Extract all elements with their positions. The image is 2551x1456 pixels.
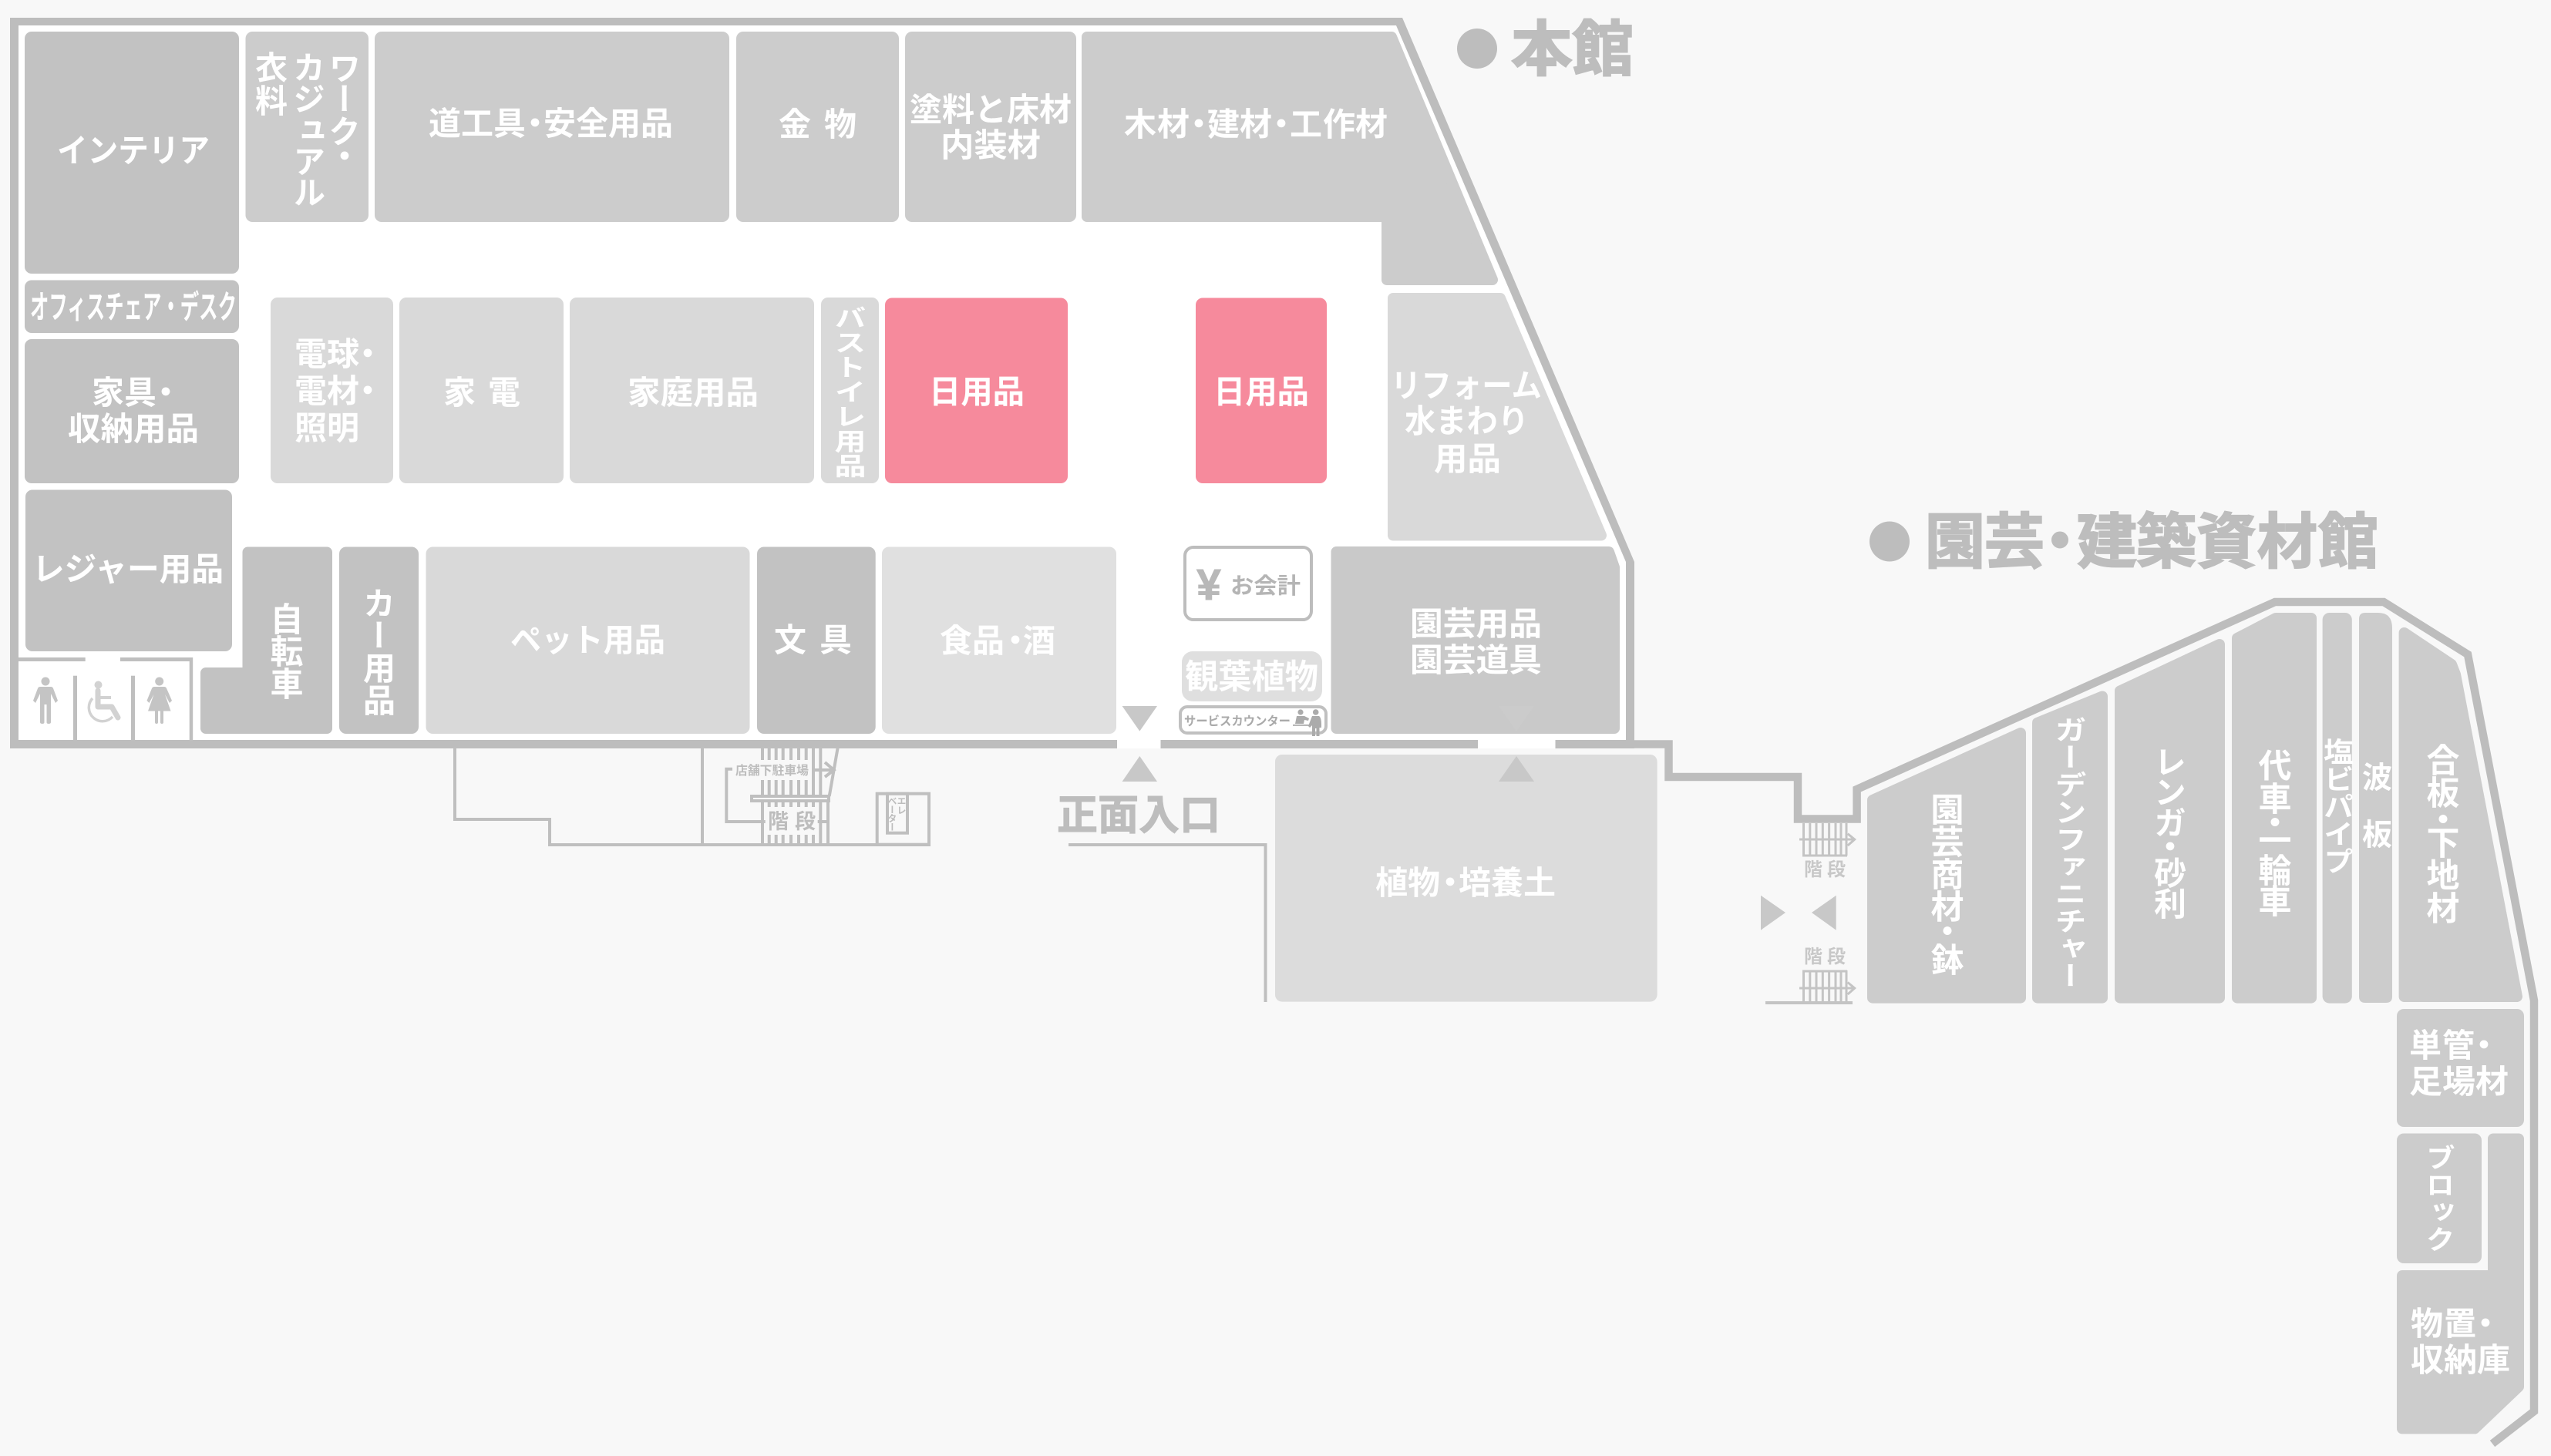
section: corrugated sheets [2357,613,2392,1003]
stairs to basement parking [702,748,838,845]
section: car goods [339,547,419,734]
arrow: to parking [815,762,834,777]
section: car goods: カー用品 [359,587,395,716]
section: carts and wheelbarrows [2237,618,2311,998]
section: furniture and storage: 収納用品 [68,411,199,447]
label: stairs: 階段 [1804,947,1846,967]
section: carts and wheelbarrows: 代車・一輪車 [2253,748,2291,917]
label: stairs: 階段 [1804,859,1846,880]
section: single pipes and scaffolding: 単管・ [2409,1027,2500,1064]
basement outline [455,748,931,845]
section: foliage plants: 観葉植物 [1185,658,1318,696]
section: sheds and storage: 物置・ [2411,1306,2502,1342]
section: renovation and plumbing goods: 用品 [1434,441,1501,477]
section: plywood and base materials: 合板・下地材 [2421,743,2459,924]
section: garden goods and tools: 園芸道具 [1410,642,1542,678]
elevator: ベーター [887,796,897,832]
service counter: サービスカウンター [1184,714,1291,728]
section: bath and toilet goods: バストイレ用品 [830,305,867,478]
section: stationery: 文具 [774,622,852,658]
restroom partitions [19,657,193,741]
arrow: front entrance inward [1122,706,1157,731]
title: garden and building materials hall: 園芸・建築資材館 [1925,508,2378,576]
section: daily goods (highlighted, left): 日用品 [929,374,1025,410]
label: front entrance: 正面入口 [1057,792,1220,839]
restrooms [19,657,193,741]
section: bath and toilet goods [821,298,879,483]
section: food and alcohol [882,547,1116,734]
building outline: main hall [10,18,1634,748]
elevator: エレ [896,796,907,815]
section: leisure goods [25,490,232,651]
section: PVC pipe: 塩ビパイプ [2319,738,2354,875]
section: daily goods (highlighted, left) [885,298,1068,483]
section: garden materials and pots [1873,733,2021,998]
section: home appliances [399,298,564,483]
icon: man [33,677,58,724]
section: light bulbs, electrical and lighting: 照明 [294,410,359,446]
section: lumber and building materials: 木材・建材・工作材 [1124,106,1388,143]
section: PVC pipe [2319,613,2354,1004]
section: tools and safety goods: 道工具・安全用品 [429,106,673,142]
section: food and alcohol: 食品・酒 [940,623,1055,659]
section: plants and soil [1275,755,1657,1002]
icon: staff and customer at counter [1293,709,1321,736]
elevator [877,794,929,845]
boundary line by front entrance [1069,845,1266,1002]
section: light bulbs, electrical and lighting: 電球・ [294,336,384,372]
checkout [1185,547,1311,620]
section: work and casual clothing: ワーク・ [324,52,361,172]
title: main hall: 本館 [1511,15,1634,83]
service counter [1180,707,1326,736]
section: pet goods [426,547,749,734]
section: blocks: ブロック [2421,1144,2453,1253]
section: sheds and storage [2402,1139,2519,1428]
section: garden furniture: ガーデンファニチャー [2050,716,2085,989]
label: stairs: 階段 [768,810,816,833]
section: pet goods: ペット用品 [510,622,665,658]
section: work and casual clothing [245,32,369,222]
checkout: お会計 [1230,573,1301,599]
arrow: front entrance outward [1122,756,1157,782]
section: office chairs and desks [25,281,239,333]
section: paint and flooring [905,32,1076,222]
label: parking under the store: 店舗下駐車場 [735,763,809,778]
section: corrugated sheets: 波 [2357,762,2391,792]
section: interior: インテリア [57,133,210,169]
section: work and casual clothing: カジュアル [288,51,325,208]
section: corrugated sheets: 板 [2357,819,2392,849]
section: garden goods and tools [1337,552,1614,731]
section: bricks and gravel: レンガ・砂利 [2149,745,2186,920]
section: light bulbs, electrical and lighting: 電材・ [294,373,384,409]
section: stationery [757,547,876,734]
section: paint and flooring: 塗料と床材 [910,92,1072,128]
section: bricks and gravel [2120,644,2220,998]
section: renovation and plumbing goods: リフォーム [1391,368,1542,404]
section: bicycles: 自転車 [265,602,302,700]
section: paint and flooring: 内装材 [941,127,1041,163]
building outline: garden and building materials hall [1633,602,2534,1444]
section: plywood and base materials [2405,633,2517,997]
section: garden furniture [2038,697,2102,998]
section: interior [25,32,239,274]
section: garden goods and tools: 園芸用品 [1410,606,1542,642]
section: single pipes and scaffolding [2397,1009,2524,1127]
section: leisure goods: レジャー用品 [32,551,224,587]
section: home appliances: 家電 [443,375,520,411]
title: main hall [1457,15,1634,83]
arrow: garden entrance [1499,756,1534,782]
section: hardware: 金物 [779,106,857,143]
section: lumber and building materials [1087,37,1493,280]
section: bicycles [206,552,327,728]
section: renovation and plumbing goods: 水まわり [1405,403,1529,439]
section: daily goods (highlighted, right): 日用品 [1213,374,1309,410]
arrow: side entrance from left [1761,896,1785,930]
arrow: side entrance from right [1812,896,1836,930]
section: renovation and plumbing goods [1391,298,1601,535]
section: daily goods (highlighted, right) [1196,298,1327,483]
section: single pipes and scaffolding: 足場材 [2409,1064,2509,1100]
section: furniture and storage [25,339,239,483]
section: light bulbs, electrical and lighting [271,298,393,483]
icon: woman [146,677,172,724]
section: garden materials and pots: 園芸商材・鉢 [1926,792,1964,976]
section: blocks [2397,1133,2482,1263]
arrow: garden entrance inner [1499,706,1534,731]
section: furniture and storage: 家具・ [92,375,182,411]
stairs: upper, garden hall [1799,823,1855,880]
section: hardware [736,32,899,222]
section: household goods: 家庭用品 [628,375,759,411]
icon: wheelchair [89,681,118,721]
section: tools and safety goods [375,32,729,222]
section: household goods [570,298,814,483]
section: plants and soil: 植物・培養土 [1375,865,1556,901]
section: office chairs and desks: オフィスチェア・デスク [30,289,237,325]
section: work and casual clothing: 衣料 [251,51,287,116]
stairs: lower, garden hall [1765,947,1855,1003]
icon: yen sign: ¥ [1196,560,1221,610]
section: sheds and storage: 収納庫 [2411,1342,2510,1378]
